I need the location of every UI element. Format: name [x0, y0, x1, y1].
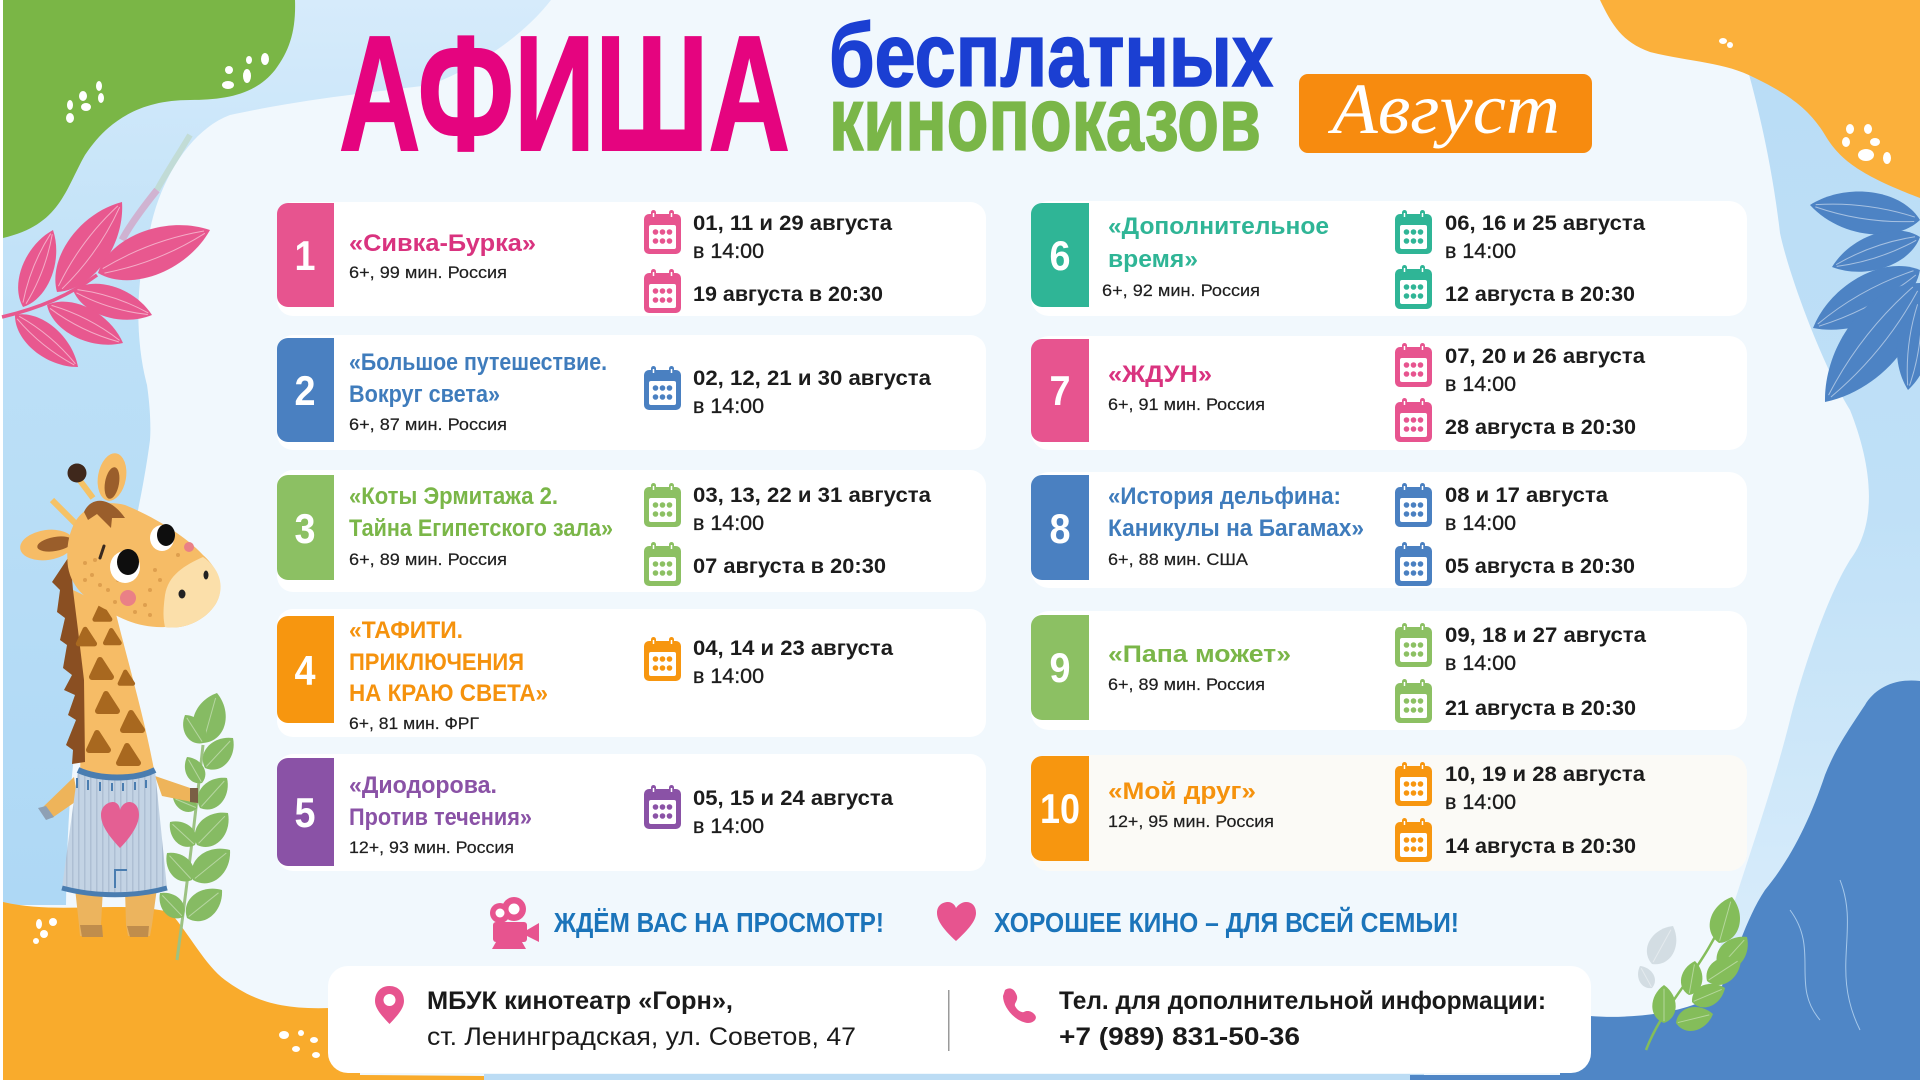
film card 1: в 14:00: [693, 240, 764, 263]
film card 6: 12 августа в 20:30: [1445, 283, 1635, 306]
illustration: plant right: [1633, 893, 1757, 1050]
film card 8: 08 и 17 августа: [1445, 484, 1608, 507]
film card 10: 10, 19 и 28 августа: [1445, 763, 1645, 786]
film card 9: 09, 18 и 27 августа: [1445, 624, 1646, 647]
giraffe dress: [62, 770, 167, 895]
film card 10: [1031, 755, 1747, 871]
film card 1: 1: [294, 232, 316, 279]
film card 9: «Папа может»: [1108, 641, 1291, 668]
giraffe legs: [75, 888, 157, 937]
film card 8: 8: [1050, 505, 1070, 552]
giraffe mane: [52, 555, 85, 764]
film card 2: «Большое путешествие.: [349, 349, 607, 376]
film card 7: 28 августа в 20:30: [1445, 416, 1636, 439]
icon: film camera: [490, 897, 539, 949]
film card 9: 6+, 89 мин. Россия: [1108, 675, 1265, 694]
film card 4: «ТАФИТИ.: [349, 617, 463, 644]
film card 10: 12+, 95 мин. Россия: [1108, 812, 1274, 831]
film card 1: «Сивка-Бурка»: [349, 230, 536, 257]
film card 5: Против течения»: [349, 804, 532, 831]
decorative blob: green top-left: [3, 0, 295, 238]
film card 3: 07 августа в 20:30: [693, 555, 886, 578]
film card 3: 3: [294, 505, 316, 552]
phone info: +7 (989) 831-50-36: [1059, 1023, 1300, 1051]
film card 4: НА КРАЮ СВЕТА»: [349, 680, 548, 707]
film card 8: 6+, 88 мин. США: [1108, 550, 1249, 569]
film card 4: 4: [294, 647, 316, 694]
film card 7: 7: [1050, 367, 1070, 414]
film card 7: в 14:00: [1445, 373, 1516, 396]
film card 1: [277, 202, 986, 316]
film card 8: 05 августа в 20:30: [1445, 555, 1635, 578]
heading: free: бесплатных: [829, 6, 1273, 106]
film card 2: в 14:00: [693, 395, 764, 418]
film card 8: [1031, 472, 1747, 588]
film card 9: [1031, 611, 1747, 730]
film card 10: в 14:00: [1445, 791, 1516, 814]
film card 1: 01, 11 и 29 августа: [693, 212, 892, 235]
film card 9: 21 августа в 20:30: [1445, 697, 1636, 720]
film card 5: «Диодорова.: [349, 772, 497, 799]
film card 4: ПРИКЛЮЧЕНИЯ: [349, 649, 524, 676]
icon: map pin: [375, 986, 404, 1024]
film card 5: [277, 754, 986, 871]
film card 3: «Коты Эрмитажа 2.: [349, 483, 558, 510]
film card 2: [277, 335, 986, 450]
giraffe face: [83, 524, 208, 617]
film card 6: [1031, 201, 1747, 316]
film card 3: 03, 13, 22 и 31 августа: [693, 484, 931, 507]
film card 6: время»: [1108, 246, 1198, 273]
illustration: giraffe: [18, 451, 221, 937]
film card 1: 6+, 99 мин. Россия: [349, 263, 507, 282]
title: afisha: АФИША: [339, 2, 790, 185]
film card 9: в 14:00: [1445, 652, 1516, 675]
film card 4: [277, 609, 986, 737]
film card 5: 05, 15 и 24 августа: [693, 787, 893, 810]
film card 7: «ЖДУН»: [1108, 361, 1212, 388]
film card 9: 9: [1050, 644, 1070, 691]
film card 6: 06, 16 и 25 августа: [1445, 212, 1645, 235]
film card 5: в 14:00: [693, 815, 764, 838]
film card 1: 19 августа в 20:30: [693, 283, 883, 306]
film card 5: 12+, 93 мин. Россия: [349, 838, 514, 857]
film card 4: 04, 14 и 23 августа: [693, 637, 893, 660]
giraffe ears and horns: [18, 451, 130, 564]
icon: phone: [1003, 988, 1036, 1023]
illustration: blue leaf branch: [1802, 184, 1920, 420]
film card 6: в 14:00: [1445, 240, 1516, 263]
film card 10: 10: [1040, 785, 1080, 832]
film card 6: «Дополнительное: [1108, 213, 1329, 240]
panel: contacts: [328, 966, 1591, 1073]
phone info: [1059, 987, 1546, 1051]
film card 2: 2: [294, 367, 316, 414]
film card 3: Тайна Египетского зала»: [349, 515, 613, 542]
phone info: Тел. для дополнительной информации:: [1059, 987, 1546, 1015]
film card 5: 5: [294, 789, 316, 836]
film card 3: в 14:00: [693, 512, 764, 535]
illustration: pink leaf branch: [2, 190, 218, 379]
film card 2: 6+, 87 мин. Россия: [349, 415, 507, 434]
address: ст. Ленинградская, ул. Советов, 47: [427, 1023, 856, 1051]
giraffe heart: [101, 802, 139, 848]
film card 7: 07, 20 и 26 августа: [1445, 345, 1645, 368]
giraffe head: [67, 503, 220, 628]
decorative blob: orange bottom-left: [3, 902, 484, 1080]
film card 6: 6+, 92 мин. Россия: [1102, 281, 1260, 300]
giraffe neck: [73, 590, 155, 775]
film card 7: [1031, 336, 1747, 450]
giraffe hair tuft: [84, 501, 125, 528]
decorative blob: blue bottom-right: [1410, 680, 1920, 1080]
film card 3: [277, 470, 986, 592]
film card 6: 6: [1050, 232, 1070, 279]
film card 10: 14 августа в 20:30: [1445, 835, 1636, 858]
illustration: green plant beside giraffe: [153, 689, 242, 960]
film card 7: 6+, 91 мин. Россия: [1108, 395, 1265, 414]
film card 4: в 14:00: [693, 665, 764, 688]
film card 3: 6+, 89 мин. Россия: [349, 550, 507, 569]
film card 2: 02, 12, 21 и 30 августа: [693, 367, 931, 390]
film card 2: Вокруг света»: [349, 381, 500, 408]
address: МБУК кинотеатр «Горн»,: [427, 987, 733, 1015]
address: [427, 987, 856, 1051]
decorative blob: orange top-right: [1600, 0, 1920, 198]
giraffe arms: [38, 776, 198, 820]
faded grey leaves: [1633, 920, 1685, 992]
slogan: waiting for you: ЖДЁМ ВАС НА ПРОСМОТР!: [553, 907, 884, 938]
film card 8: в 14:00: [1445, 512, 1516, 535]
slogan: good cinema: ХОРОШЕЕ КИНО – ДЛЯ ВСЕЙ СЕМЬИ!: [994, 906, 1459, 938]
film card 10: «Мой друг»: [1108, 778, 1256, 805]
film card 8: Каникулы на Багамах»: [1108, 515, 1364, 542]
film card 8: «История дельфина:: [1108, 483, 1341, 510]
badge: month: Август: [1328, 69, 1560, 149]
icon: heart: [937, 902, 976, 941]
heading: film screenings: кинопоказов: [829, 70, 1261, 170]
giraffe neck spots: [78, 606, 142, 763]
film card 4: 6+, 81 мин. ФРГ: [349, 714, 479, 733]
